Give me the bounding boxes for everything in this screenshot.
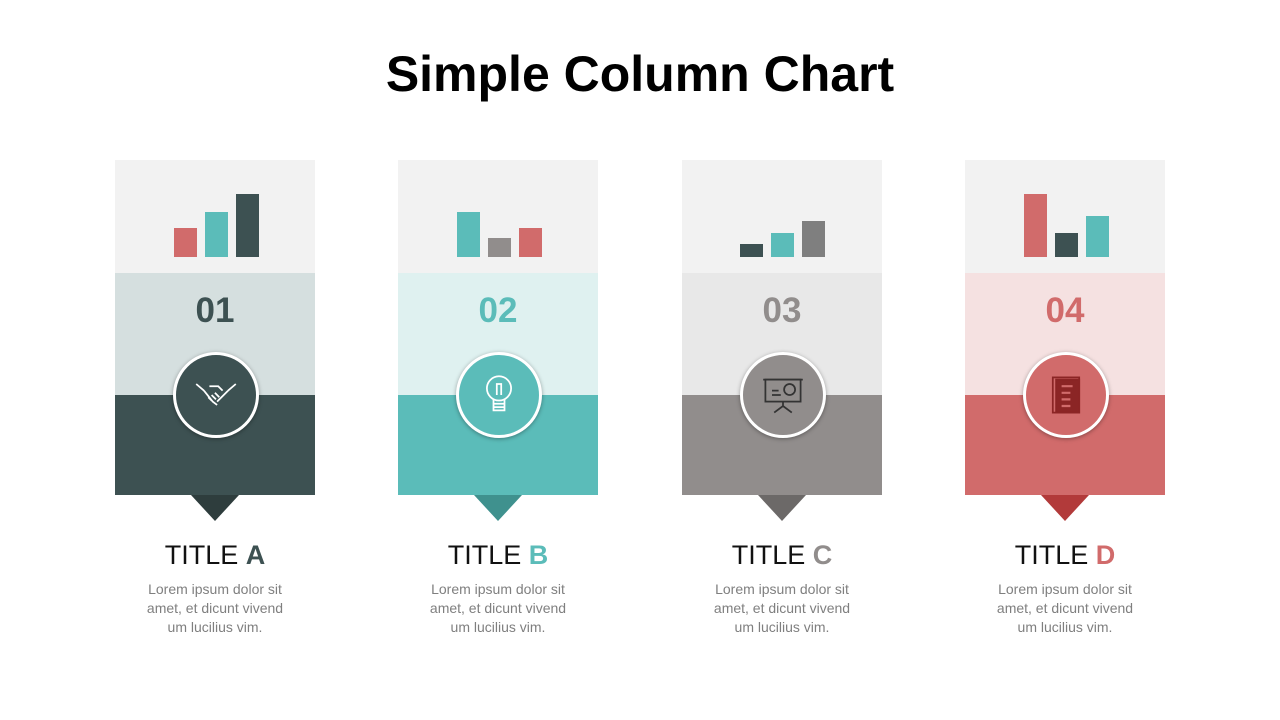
text C: Lorem ipsum dolor sit amet, et dicunt vivend um lucilius vim.	[714, 581, 850, 635]
bar chart B	[457, 212, 542, 257]
heading D: TITLE D	[1015, 540, 1115, 570]
text A: Lorem ipsum dolor sit amet, et dicunt vivend um lucilius vim.	[147, 581, 283, 635]
title: Simple Column Chart	[386, 46, 894, 102]
icon: lightbulb	[456, 352, 542, 438]
number 01: 01	[196, 291, 234, 330]
bar chart A	[174, 194, 259, 257]
number 04: 04	[1046, 291, 1084, 330]
bar chart D	[1024, 194, 1109, 257]
panel: column D	[965, 160, 1165, 635]
icon: book	[1023, 352, 1109, 438]
panel: column A	[115, 160, 315, 635]
number 02: 02	[479, 291, 517, 330]
text B: Lorem ipsum dolor sit amet, et dicunt vivend um lucilius vim.	[430, 581, 566, 635]
heading B: TITLE B	[448, 540, 548, 570]
bar chart C	[740, 221, 825, 257]
heading C: TITLE C	[732, 540, 832, 570]
heading A: TITLE A	[165, 540, 265, 570]
icon: handshake	[173, 352, 259, 438]
arrow A	[191, 495, 239, 521]
number 03: 03	[763, 291, 801, 330]
panel: column C	[682, 160, 882, 635]
arrow B	[474, 495, 522, 521]
text D: Lorem ipsum dolor sit amet, et dicunt vivend um lucilius vim.	[997, 581, 1133, 635]
arrow C	[758, 495, 806, 521]
panel: column B	[398, 160, 598, 635]
arrow D	[1041, 495, 1089, 521]
icon: presentation	[740, 352, 826, 438]
